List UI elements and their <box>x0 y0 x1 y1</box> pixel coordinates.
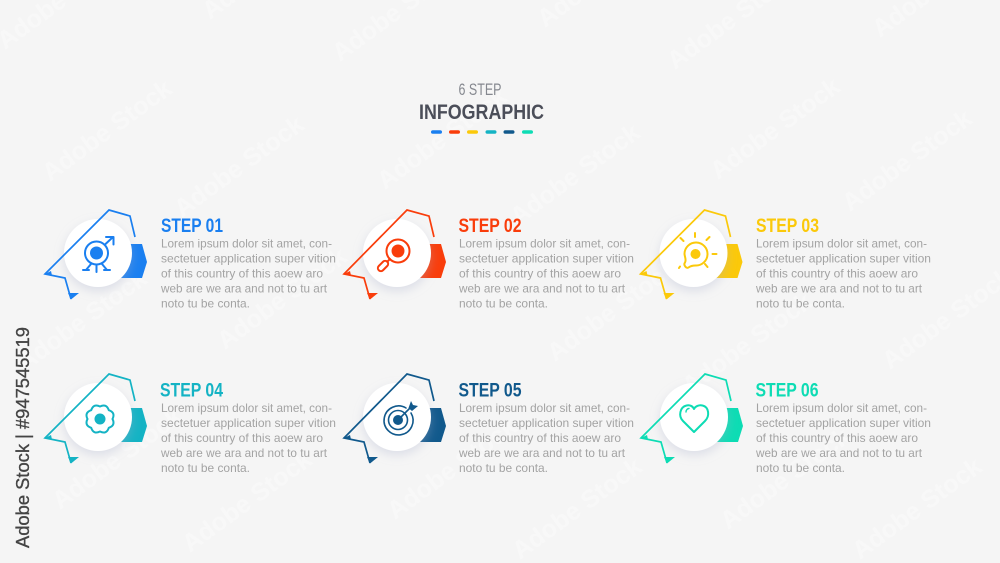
step 01 panel <box>45 210 336 311</box>
step 06 body text: noto tu be conta. <box>756 461 845 475</box>
step 03 heading: STEP 03 <box>756 216 819 237</box>
step 01 body text: of this country of this aoew aro <box>161 267 323 281</box>
step 06 panel <box>641 374 931 475</box>
step 04 body text: noto tu be conta. <box>161 461 250 475</box>
step 04 body text: Lorem ipsum dolor sit amet, con- <box>161 401 332 415</box>
badge: step 03 <box>640 210 742 300</box>
step 02 heading: STEP 02 <box>458 216 522 237</box>
icon: gear flower <box>86 405 114 433</box>
step 05 heading: STEP 05 <box>458 380 522 402</box>
step 05 body text: web are we ara and not to tu art <box>458 446 626 460</box>
step 01 body text: Lorem ipsum dolor sit amet, con- <box>161 237 332 251</box>
step 04 body text: sectetuer application super vition <box>161 416 336 430</box>
step 02 body text: of this country of this aoew aro <box>459 267 621 281</box>
badge: step 06 <box>641 374 743 464</box>
icon: magnifier <box>377 240 410 272</box>
watermark pattern: Adobe Stock <box>37 74 177 187</box>
step 05 body text: sectetuer application super vition <box>459 416 634 430</box>
step 03 body text: of this country of this aoew aro <box>756 267 918 281</box>
badge: step 01 <box>45 210 147 300</box>
watermark pattern: Adobe Stock <box>677 287 817 400</box>
stock id vertical text: Adobe Stock | #947545519 <box>12 327 33 548</box>
step 03 panel <box>640 210 931 311</box>
watermark pattern: Adobe Stock <box>847 452 987 563</box>
icon: target with arrow <box>83 237 114 272</box>
watermark pattern: Adobe Stock <box>382 412 522 525</box>
step 04 body text: of this country of this aoew aro <box>161 431 323 445</box>
heading: infographic: INFOGRAPHIC <box>419 101 544 124</box>
step 04 body text <box>160 401 336 475</box>
step 02 body text <box>458 237 634 311</box>
icon: light bulb <box>679 233 716 268</box>
step 01 body text: sectetuer application super vition <box>161 252 336 266</box>
step 05 body text: noto tu be conta. <box>459 461 548 475</box>
watermark pattern: Adobe Stock <box>705 72 845 185</box>
badge: step 02 <box>344 210 446 300</box>
watermark pattern: Adobe Stock <box>715 422 855 535</box>
step 04 heading: STEP 04 <box>160 380 223 402</box>
heading: 6 step: 6 STEP <box>458 80 502 99</box>
step 02 body text: sectetuer application super vition <box>459 252 634 266</box>
step 06 body text: web are we ara and not to tu art <box>755 446 923 460</box>
step 04 body text: web are we ara and not to tu art <box>160 446 328 460</box>
watermark pattern: Adobe Stock <box>507 452 647 563</box>
watermark pattern: Adobe Stock <box>177 445 317 558</box>
watermark pattern: Adobe Stock <box>212 242 352 355</box>
step 01 body text: web are we ara and not to tu art <box>160 282 328 296</box>
step 03 body text: noto tu be conta. <box>756 297 845 311</box>
colour dash legend <box>431 130 533 134</box>
step 01 heading: STEP 01 <box>161 216 223 237</box>
step 02 panel <box>344 210 634 311</box>
step 05 body text: of this country of this aoew aro <box>459 431 621 445</box>
watermark pattern: Adobe Stock <box>12 264 152 377</box>
step 01 body text: noto tu be conta. <box>161 297 250 311</box>
step 05 body text: Lorem ipsum dolor sit amet, con- <box>459 401 630 415</box>
icon: dartboard <box>384 401 418 435</box>
watermark pattern: Adobe Stock <box>505 118 645 231</box>
step 04 panel <box>45 374 336 475</box>
step 06 heading: STEP 06 <box>756 380 818 402</box>
step 03 body text <box>755 237 931 311</box>
watermark pattern: Adobe Stock <box>47 402 187 515</box>
step 02 body text: Lorem ipsum dolor sit amet, con- <box>459 237 630 251</box>
step 03 body text: Lorem ipsum dolor sit amet, con- <box>756 237 927 251</box>
watermark pattern: Adobe Stock <box>372 82 512 195</box>
step 02 body text: noto tu be conta. <box>459 297 548 311</box>
step 05 body text <box>458 401 634 475</box>
step 05 panel <box>344 374 634 475</box>
step 02 body text: web are we ara and not to tu art <box>458 282 626 296</box>
step 06 body text: sectetuer application super vition <box>756 416 931 430</box>
step 06 body text: Lorem ipsum dolor sit amet, con- <box>756 401 927 415</box>
watermark pattern: Adobe Stock <box>837 104 977 217</box>
badge: step 04 <box>45 374 147 464</box>
step 03 body text: web are we ara and not to tu art <box>755 282 923 296</box>
step 03 body text: sectetuer application super vition <box>756 252 931 266</box>
watermark pattern: Adobe Stock <box>542 254 682 367</box>
step 06 body text <box>755 401 931 475</box>
icon: heart <box>680 405 708 432</box>
badge: step 05 <box>344 374 446 464</box>
step 06 body text: of this country of this aoew aro <box>756 431 918 445</box>
watermark pattern: Adobe Stock <box>169 110 309 223</box>
step 01 body text <box>160 237 336 311</box>
